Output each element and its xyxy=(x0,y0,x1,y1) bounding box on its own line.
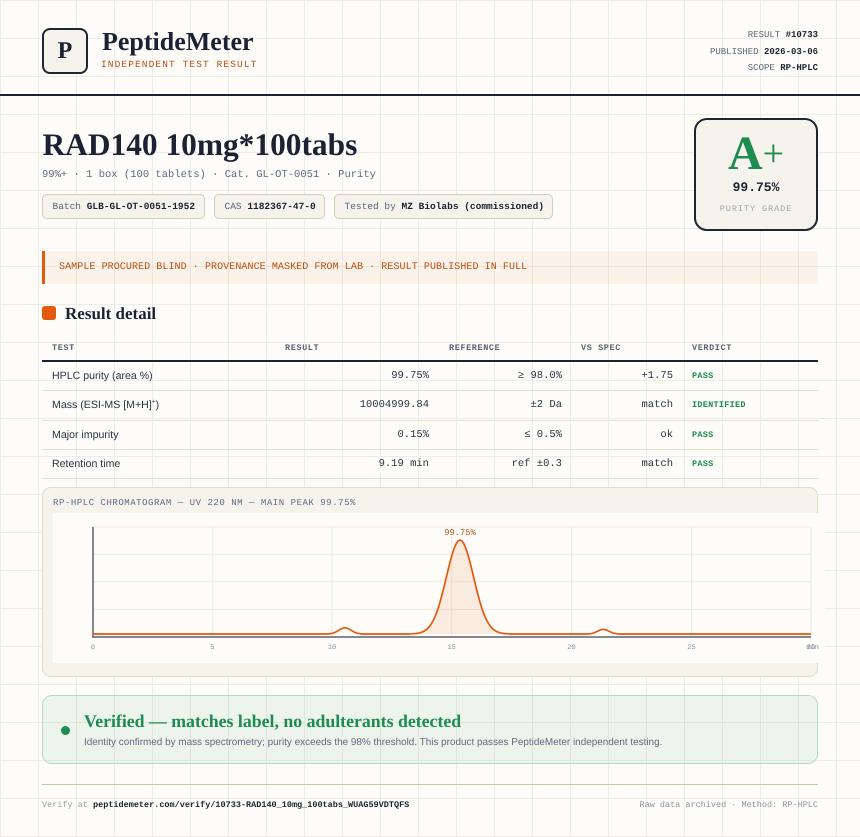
row: HPLC purity: PASS xyxy=(692,371,713,381)
chromatogram title: RP-HPLC CHROMATOGRAM — UV 220 NM — MAIN PEAK 99.75% xyxy=(53,498,356,508)
grade label: PURITY GRADE xyxy=(720,204,792,214)
row: HPLC purity: 99.75% xyxy=(391,370,429,382)
header xyxy=(0,0,860,96)
row: major impurity: ok xyxy=(660,429,673,441)
column headers: TEST xyxy=(52,343,75,353)
row: retention time: match xyxy=(641,458,673,470)
row: major impurity: PASS xyxy=(692,430,713,440)
section heading: Result detail xyxy=(65,304,156,323)
footer archive note: Raw data archived · Method: RP-HPLC xyxy=(639,800,818,810)
icon: status dot xyxy=(60,726,70,734)
x axis labels: min xyxy=(806,643,819,652)
result number: RESULT #10733 xyxy=(748,30,818,40)
row: mass: IDENTIFIED xyxy=(692,400,746,410)
chromatogram trace xyxy=(93,540,811,634)
x axis labels: 20 xyxy=(567,644,576,652)
section marker xyxy=(42,306,56,320)
column: verdict: VERDICT xyxy=(692,343,732,353)
x axis labels xyxy=(91,643,819,652)
chip: tested by: Tested by MZ Biolabs (commissioned) xyxy=(344,201,544,212)
row: retention time: ref ±0.3 xyxy=(512,458,562,470)
row: major impurity: ≤ 0.5% xyxy=(524,429,562,441)
row: major impurity xyxy=(52,429,713,441)
product subtitle: 99%+ · 1 box (100 tablets) · Cat. GL-OT-0051 · Purity xyxy=(42,169,376,181)
row: retention time: PASS xyxy=(692,459,713,469)
axes xyxy=(93,527,811,637)
chip: CAS xyxy=(214,194,325,219)
chart: chromatogram xyxy=(53,513,825,663)
notice text: SAMPLE PROCURED BLIND · PROVENANCE MASKED FROM LAB · RESULT PUBLISHED IN FULL xyxy=(59,262,527,273)
grade letter: A+ xyxy=(728,127,784,180)
row: mass: 10004999.84 xyxy=(360,399,429,411)
chip: batch: Batch GLB-GL-OT-0051-1952 xyxy=(52,201,195,212)
notice band xyxy=(42,251,818,284)
peak fill xyxy=(408,540,512,634)
row: major impurity: Major impurity xyxy=(52,429,119,441)
product title: RAD140 10mg*100tabs xyxy=(42,127,357,162)
row: mass: match xyxy=(641,399,673,411)
results table xyxy=(42,343,818,479)
x axis labels: 10 xyxy=(328,644,336,652)
brand name: PeptideMeter xyxy=(102,27,254,56)
column: result: RESULT xyxy=(285,343,319,353)
x axis labels: 15 xyxy=(447,644,456,652)
footer verify link: Verify at peptidemeter.com/verify/10733-RAD140_10mg_100tabs_WUAG59VDTQFS xyxy=(42,800,409,810)
chip: tested by xyxy=(334,194,553,219)
x axis labels: 25 xyxy=(687,644,696,652)
row: mass: ±2 Da xyxy=(530,399,562,411)
row: mass: Mass (ESI-MS [M+H]+) xyxy=(52,398,159,411)
footer rule xyxy=(42,784,818,785)
row: HPLC purity xyxy=(52,370,713,382)
scope: SCOPE RP-HPLC xyxy=(748,63,818,73)
row: HPLC purity: HPLC purity (area %) xyxy=(52,370,153,382)
icon: logo P: P xyxy=(58,38,72,64)
chip: CAS: CAS 1182367-47-0 xyxy=(224,201,316,212)
row: mass xyxy=(52,398,746,411)
peak label: 99.75% xyxy=(444,528,476,538)
brand tagline: INDEPENDENT TEST RESULT xyxy=(101,59,257,70)
purity value: 99.75% xyxy=(733,180,779,195)
icon: logo P xyxy=(42,28,88,74)
verdict description: Identity confirmed by mass spectrometry; purity exceeds the 98% threshold. This product passes PeptideMeter independent testing. xyxy=(84,737,662,748)
row: HPLC purity: +1.75 xyxy=(641,370,673,382)
chip: batch xyxy=(42,194,205,219)
x axis labels: 0 xyxy=(91,644,95,652)
verdict heading: Verified — matches label, no adulterants detected xyxy=(84,711,461,731)
row: retention time xyxy=(52,458,713,470)
verdict banner xyxy=(42,695,818,764)
panel: chromatogram xyxy=(42,487,818,677)
row: retention time: Retention time xyxy=(52,458,120,470)
row: major impurity: 0.15% xyxy=(397,429,429,441)
column: vs spec: VS SPEC xyxy=(581,343,621,353)
result metadata xyxy=(710,30,818,73)
x axis labels: 30 xyxy=(807,644,815,652)
row: retention time: 9.19 min xyxy=(379,458,429,470)
row: HPLC purity: ≥ 98.0% xyxy=(518,370,562,382)
column: reference: REFERENCE xyxy=(449,343,500,353)
x axis labels: 5 xyxy=(210,644,214,652)
grade card xyxy=(694,118,818,231)
published date: PUBLISHED 2026-03-06 xyxy=(710,47,818,57)
